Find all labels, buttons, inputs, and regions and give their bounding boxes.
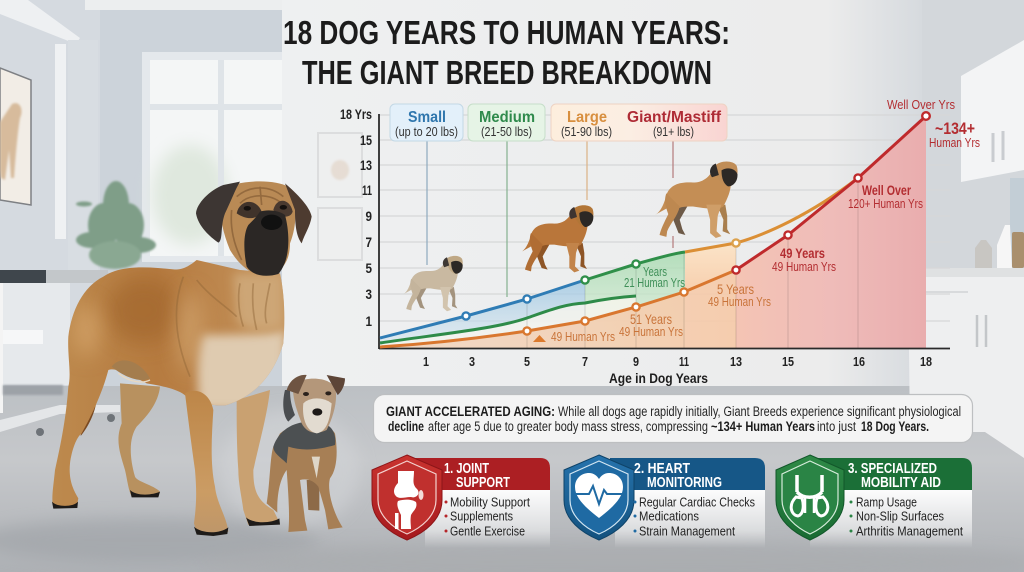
curve: medium lower green bbox=[380, 296, 636, 343]
data labels: orange: 49 Human Yrs bbox=[551, 330, 615, 344]
y axis labels: 5 bbox=[366, 260, 372, 276]
curve: small blue bbox=[380, 280, 585, 338]
card list: Regular Cardiac Checks bbox=[639, 494, 755, 510]
card title bbox=[444, 461, 510, 491]
chart: dog age to human age bbox=[340, 97, 980, 386]
curve: medium upper green bbox=[585, 252, 685, 280]
card body bbox=[615, 490, 765, 548]
card list: Mobility Support bbox=[450, 494, 530, 510]
data labels: orange: 51 Years bbox=[630, 311, 672, 327]
card header bbox=[815, 458, 972, 490]
icon: harness shield bbox=[776, 455, 844, 540]
panel: joint support bbox=[372, 455, 550, 548]
callout: giant accelerated aging: ~134+ Human Years bbox=[711, 419, 815, 434]
panel: heart monitoring bbox=[564, 455, 765, 548]
panel: specialized mobility aid bbox=[776, 455, 972, 548]
card header bbox=[610, 458, 765, 490]
left side wall bbox=[0, 0, 100, 390]
legend: large and giant bbox=[551, 104, 727, 141]
card list: Strain Management bbox=[639, 524, 735, 538]
title: THE GIANT BREED BREAKDOWN bbox=[302, 54, 712, 91]
title: 18 DOG YEARS TO HUMAN YEARS: bbox=[283, 14, 730, 51]
x axis labels: 7 bbox=[582, 354, 588, 369]
data labels: red: 49 Human Yrs bbox=[772, 260, 836, 274]
area fills bbox=[380, 116, 926, 348]
illustration: small-size dog on chart bbox=[403, 256, 463, 311]
bottles bbox=[975, 225, 1024, 268]
light wall behind chart bbox=[282, 0, 922, 392]
x axis labels bbox=[423, 354, 932, 369]
card list: Gentle Exercise bbox=[450, 524, 525, 538]
data labels: red: Well Over bbox=[862, 183, 912, 198]
card list bbox=[444, 494, 530, 538]
title bbox=[283, 14, 730, 91]
plant bbox=[76, 181, 156, 269]
legend connector lines bbox=[427, 141, 673, 297]
head bbox=[220, 181, 295, 275]
x axis labels: 11 bbox=[679, 354, 689, 369]
callout: giant accelerated aging: after age 5 due to greater body mass stress, compressing bbox=[428, 419, 708, 434]
card list bbox=[850, 494, 963, 538]
x axis labels: 13 bbox=[730, 354, 742, 369]
wall pictures: right frames bbox=[318, 133, 362, 260]
data labels: red bbox=[772, 97, 980, 274]
callout: giant accelerated aging: 18 Dog Years. bbox=[861, 419, 929, 434]
callout: giant accelerated aging: GIANT ACCELERATED AGING: bbox=[386, 403, 555, 419]
gridlines bbox=[380, 115, 950, 321]
mastiff bbox=[52, 181, 312, 536]
card list: Medications bbox=[639, 508, 699, 524]
callout: giant accelerated aging: decline bbox=[388, 419, 424, 434]
curve: large orange lower bbox=[380, 270, 736, 347]
x axis labels: 18 bbox=[920, 354, 932, 369]
x axis labels: 16 bbox=[853, 354, 865, 369]
x axis labels: 3 bbox=[469, 354, 475, 369]
y axis labels: 7 bbox=[366, 234, 372, 250]
data labels: green: 21 Human Yrs bbox=[624, 276, 685, 290]
card list: Supplements bbox=[450, 508, 513, 524]
legend: small: (up to 20 lbs) bbox=[395, 125, 458, 139]
data labels: orange: 49 Human Yrs bbox=[708, 295, 771, 309]
icon: knee joint shield bbox=[372, 455, 442, 540]
card list: Arthritis Management bbox=[856, 524, 963, 538]
curve: giant red bbox=[736, 116, 926, 270]
card title: 2. HEART bbox=[634, 461, 690, 477]
legend: large and giant: Large bbox=[567, 109, 607, 126]
legend: medium: Medium bbox=[479, 109, 535, 126]
data labels: green: Years bbox=[643, 265, 667, 279]
callout: giant accelerated aging bbox=[374, 394, 972, 442]
data labels: red: ~134+ bbox=[935, 119, 975, 138]
card title: MOBILITY AID bbox=[861, 475, 941, 491]
legend: medium bbox=[468, 104, 545, 141]
y axis labels: 9 bbox=[366, 208, 372, 224]
illustration: large mastiff and small terrier bbox=[52, 181, 345, 536]
paws bbox=[52, 490, 280, 536]
illustration: medium-size dog on chart bbox=[521, 205, 593, 272]
callout: giant accelerated aging: into just bbox=[817, 419, 856, 434]
y axis labels: 13 bbox=[360, 157, 372, 173]
card title: MONITORING bbox=[647, 475, 722, 491]
curve: large orange upper bbox=[685, 178, 858, 252]
exam table bbox=[0, 270, 120, 436]
data labels: orange bbox=[533, 281, 771, 344]
legend: medium: (21-50 lbs) bbox=[481, 125, 532, 139]
data labels: red: 49 Years bbox=[780, 246, 825, 261]
terrier bbox=[267, 375, 345, 532]
card body bbox=[425, 490, 550, 548]
coat shading clipped to body bbox=[73, 273, 285, 410]
vertical guide lines bbox=[527, 178, 858, 348]
x axis labels: 5 bbox=[524, 354, 530, 369]
illustration: giant dog on chart bbox=[655, 162, 738, 238]
wall picture: dog bbox=[0, 68, 31, 205]
y axis labels: 1 bbox=[366, 313, 372, 329]
card list: Non-Slip Surfaces bbox=[856, 508, 944, 524]
y axis labels: 15 bbox=[360, 132, 372, 148]
card title bbox=[848, 461, 941, 491]
legend: large and giant: (51-90 lbs) bbox=[561, 125, 612, 139]
lower cabinet and counter bbox=[908, 268, 1024, 458]
card list bbox=[634, 494, 755, 538]
card header bbox=[415, 458, 550, 490]
legend: large and giant: (91+ lbs) bbox=[653, 125, 694, 139]
data labels: green bbox=[624, 265, 685, 290]
data labels: red: Well Over Yrs bbox=[887, 97, 955, 112]
card title: 3. SPECIALIZED bbox=[848, 461, 937, 477]
x axis labels: 9 bbox=[633, 354, 639, 369]
floor bbox=[0, 386, 1024, 572]
card body bbox=[810, 490, 972, 548]
data labels: orange: 5 Years bbox=[717, 281, 754, 297]
card title: SUPPORT bbox=[456, 475, 510, 491]
upper cabinet bbox=[961, 40, 1024, 268]
data point markers bbox=[462, 112, 930, 335]
y axis labels bbox=[340, 106, 372, 329]
data labels: red: 120+ Human Yrs bbox=[848, 197, 923, 211]
legend: small bbox=[390, 104, 463, 141]
axes bbox=[379, 114, 950, 349]
back wall bbox=[100, 8, 290, 390]
y axis labels: 11 bbox=[362, 182, 372, 198]
card title bbox=[634, 461, 722, 491]
y axis labels: 3 bbox=[366, 286, 372, 302]
icon: heart shield bbox=[564, 455, 634, 540]
x axis labels: 1 bbox=[423, 354, 429, 369]
data labels: red: Human Yrs bbox=[929, 136, 980, 150]
window bbox=[142, 52, 284, 262]
card list: Ramp Usage bbox=[856, 494, 917, 510]
data labels: orange: 49 Human Yrs bbox=[619, 325, 683, 339]
x axis labels: 15 bbox=[782, 354, 794, 369]
legend: small: Small bbox=[408, 109, 446, 126]
x axis title: Age in Dog Years bbox=[609, 370, 708, 386]
y axis labels: 18 Yrs bbox=[340, 106, 372, 122]
legend: large and giant: Giant/Mastiff bbox=[627, 109, 722, 126]
card title: 1. JOINT bbox=[444, 461, 489, 477]
